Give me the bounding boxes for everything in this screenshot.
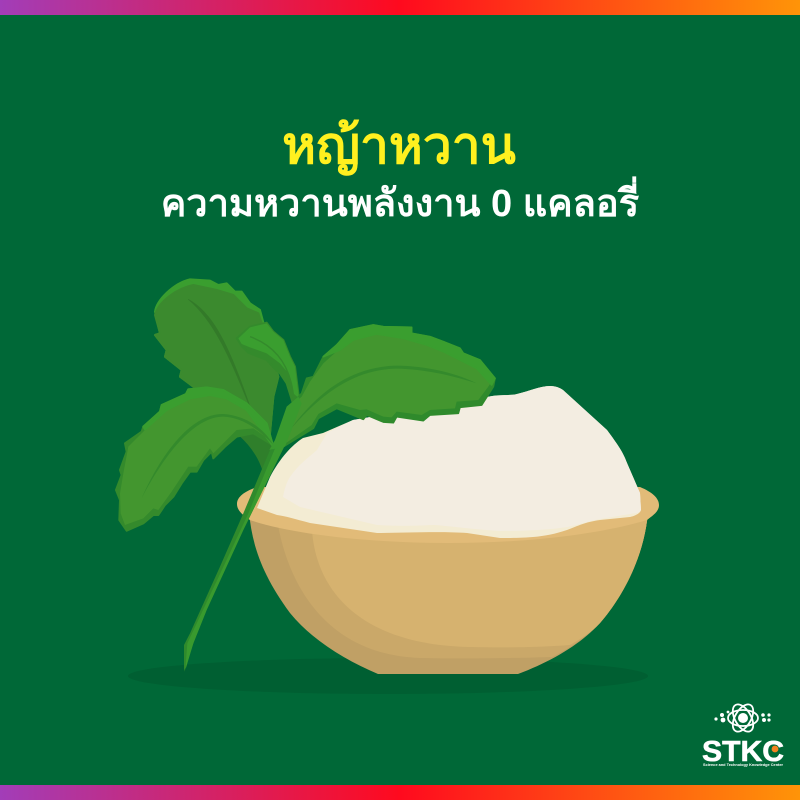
- left leaf vein: [142, 414, 273, 498]
- sweetener powder: [257, 386, 641, 538]
- bowl: [237, 487, 659, 674]
- stem dark side: [184, 445, 285, 672]
- right leaf vein: [290, 366, 477, 430]
- small leaf body: [238, 323, 299, 398]
- bowl mid shade: [278, 512, 648, 658]
- stem junction: [269, 397, 302, 450]
- stem light side: [185, 445, 285, 670]
- right leaf top edge: [323, 325, 495, 385]
- leaf underside: [238, 427, 273, 473]
- back leaf body: [155, 285, 278, 433]
- top gradient bar: [0, 0, 800, 15]
- plant: [116, 279, 495, 672]
- bottom gradient bar: [0, 785, 800, 800]
- left leaf shade: [116, 387, 273, 531]
- logo: STKC: [702, 701, 784, 768]
- subtitle: ความหวานพลังงาน 0 แคลอรี่: [161, 183, 639, 225]
- powder base: [257, 386, 641, 538]
- back leaf edge: [155, 279, 278, 433]
- powder highlight: [283, 386, 641, 531]
- back leaf: [155, 279, 278, 433]
- bowl light face: [312, 512, 648, 647]
- left leaf body: [120, 394, 273, 525]
- logo dots: [714, 711, 771, 722]
- right leaf body: [275, 333, 492, 447]
- back leaf vein: [188, 299, 252, 412]
- left leaf: [116, 387, 273, 531]
- logo atom: [728, 701, 758, 735]
- logo accent dot: [772, 746, 778, 752]
- small leaf shade: [237, 323, 299, 410]
- left leaf top edge: [143, 387, 273, 447]
- logo tagline: Science and Technology Knowledge Center: [703, 762, 783, 767]
- stem: [184, 397, 302, 672]
- bowl body: [249, 512, 648, 674]
- right leaf edge: [275, 325, 495, 447]
- ground shadow: [128, 658, 648, 694]
- right leaf: [275, 325, 495, 447]
- bowl rim: [237, 487, 659, 543]
- small leaf vein: [250, 337, 294, 402]
- title: หญ้าหวาน: [282, 116, 516, 174]
- small leaf: [237, 323, 299, 410]
- logo wordmark: STKC: [702, 736, 784, 768]
